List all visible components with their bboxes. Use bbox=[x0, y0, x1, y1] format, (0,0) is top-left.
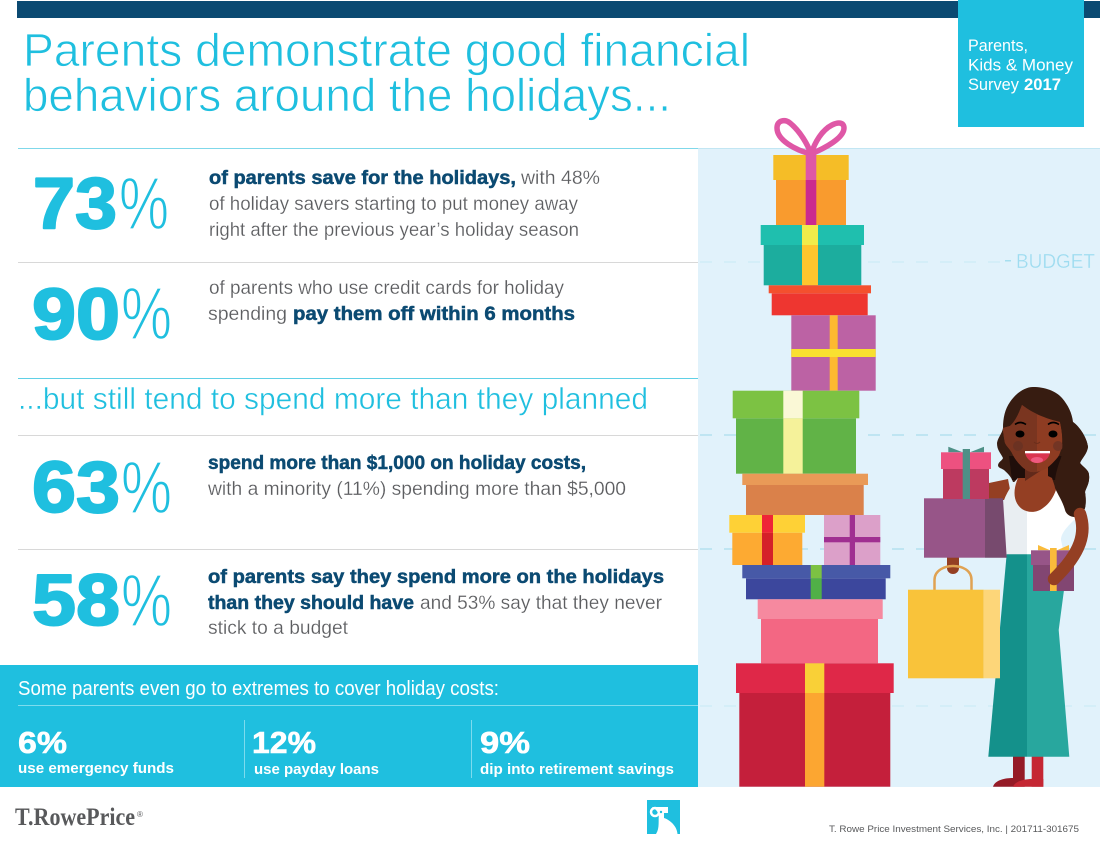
panel: extremes to cover holiday costs: Some parents even go to extremes to cover holiday costs: bbox=[18, 678, 499, 700]
survey badge: Kids & Money bbox=[968, 56, 1073, 74]
woman carrying gifts bbox=[908, 387, 1089, 787]
top bar bbox=[17, 1, 1100, 18]
stat: 90% pay off credit cards: spending bbox=[208, 303, 287, 325]
survey badge: Survey bbox=[968, 75, 1019, 94]
survey badge: 2017 bbox=[1024, 75, 1061, 94]
face bbox=[1003, 405, 1063, 472]
icon: ram logo bbox=[647, 800, 680, 834]
stat: 9% retirement savings bbox=[480, 725, 674, 778]
stat: 58% spend more than they should: stick to a budget bbox=[208, 617, 349, 639]
budget label: BUDGET bbox=[1016, 251, 1095, 273]
stat: 58% spend more than they should: and 53% say that they never bbox=[420, 592, 662, 614]
stat: 9% retirement savings: dip into retirement savings bbox=[480, 761, 674, 778]
stat: 58% spend more than they should: of parents say they spend more on the holidays bbox=[208, 567, 664, 588]
stat: 63% spend more than $1,000 bbox=[32, 446, 626, 529]
stat: 73% save for the holidays: right after the previous year’s holiday season bbox=[209, 219, 579, 241]
stat: 90% pay off credit cards: 90 bbox=[32, 275, 120, 355]
survey badge: Parents, bbox=[968, 36, 1028, 55]
stat: 6% emergency funds: 6% bbox=[18, 725, 67, 760]
stat: 58% spend more than they should: % bbox=[121, 559, 172, 642]
T. Rowe Price wordmark: T.RowePrice bbox=[15, 804, 135, 831]
stat: 12% payday loans: use payday loans bbox=[254, 761, 379, 778]
hair front lock bbox=[1055, 422, 1089, 517]
shopping bag bbox=[908, 566, 1000, 678]
gift in hand: pink box with teal bow bbox=[941, 447, 991, 499]
stat: 12% payday loans bbox=[252, 725, 379, 778]
gift in hand: big purple box bbox=[924, 498, 1007, 558]
gift: green bbox=[733, 391, 859, 474]
gift: yellow small bbox=[729, 515, 805, 565]
stat: 90% pay off credit cards: pay them off within 6 months bbox=[293, 304, 575, 325]
hair back bbox=[997, 387, 1089, 517]
gift: red bbox=[769, 285, 871, 315]
stat: 58% spend more than they should bbox=[32, 559, 664, 642]
gift stack illustration bbox=[729, 121, 894, 787]
stat: 63% spend more than $1,000: 63 bbox=[32, 448, 120, 528]
gift: purple bbox=[791, 315, 876, 391]
gift: tan bbox=[742, 474, 868, 515]
bag handle arm bbox=[947, 550, 959, 574]
shirt bbox=[1000, 478, 1076, 554]
forearm bbox=[1054, 514, 1082, 579]
upper arm behind box bbox=[989, 479, 1012, 500]
panel: extremes to cover holiday costs bbox=[0, 665, 698, 787]
gift: large crimson bbox=[736, 663, 894, 787]
stat: 73% save for the holidays: of holiday savers starting to put money away bbox=[209, 193, 578, 215]
subheading: ...but still tend to spend more than they planned bbox=[18, 381, 648, 416]
stat: 73% save for the holidays bbox=[33, 162, 600, 245]
stat: 73% save for the holidays: of parents save for the holidays, bbox=[209, 168, 516, 189]
title bbox=[23, 24, 750, 121]
T. Rowe Price wordmark: ® bbox=[137, 810, 143, 819]
stat: 90% pay off credit cards: % bbox=[121, 272, 172, 355]
stat: 73% save for the holidays: with 48% bbox=[520, 167, 600, 189]
gift: teal bbox=[761, 225, 864, 285]
stat: 6% emergency funds bbox=[18, 725, 174, 777]
stat: 73% save for the holidays: 73 bbox=[33, 164, 117, 244]
gift: orange with pink bow bbox=[773, 121, 849, 225]
stat: 63% spend more than $1,000: with a minority (11%) spending more than $5,000 bbox=[207, 478, 626, 500]
gift: salmon bbox=[758, 599, 883, 663]
neck and chest bbox=[1015, 460, 1056, 512]
title: behaviors around the holidays... bbox=[23, 69, 671, 121]
stat: 9% retirement savings: 9% bbox=[480, 725, 530, 760]
stat: 73% save for the holidays: % bbox=[119, 162, 169, 245]
under-hair shadow bbox=[1009, 456, 1063, 480]
stat: 58% spend more than they should: than they should have bbox=[208, 593, 414, 614]
stat: 12% payday loans: 12% bbox=[252, 725, 316, 760]
stat: 90% pay off credit cards bbox=[32, 272, 575, 355]
gift at hip: small purple box bbox=[1031, 545, 1074, 591]
gift: pink small bbox=[824, 515, 880, 565]
stat: 58% spend more than they should: 58 bbox=[32, 561, 120, 641]
stat: 63% spend more than $1,000: spend more than $1,000 on holiday costs, bbox=[208, 453, 586, 474]
survey badge bbox=[958, 0, 1084, 127]
stat: 90% pay off credit cards: of parents who use credit cards for holiday bbox=[209, 277, 564, 299]
stat: 63% spend more than $1,000: % bbox=[121, 446, 172, 529]
stat: 6% emergency funds: use emergency funds bbox=[18, 760, 174, 777]
footer credit: T. Rowe Price Investment Services, Inc. | 201711-301675 bbox=[829, 824, 1079, 835]
title: Parents demonstrate good financial bbox=[23, 24, 750, 76]
gift: blue bbox=[742, 565, 890, 599]
right illustration background panel bbox=[698, 148, 1100, 787]
skirt bbox=[988, 554, 1069, 757]
legs and shoes bbox=[993, 756, 1043, 787]
